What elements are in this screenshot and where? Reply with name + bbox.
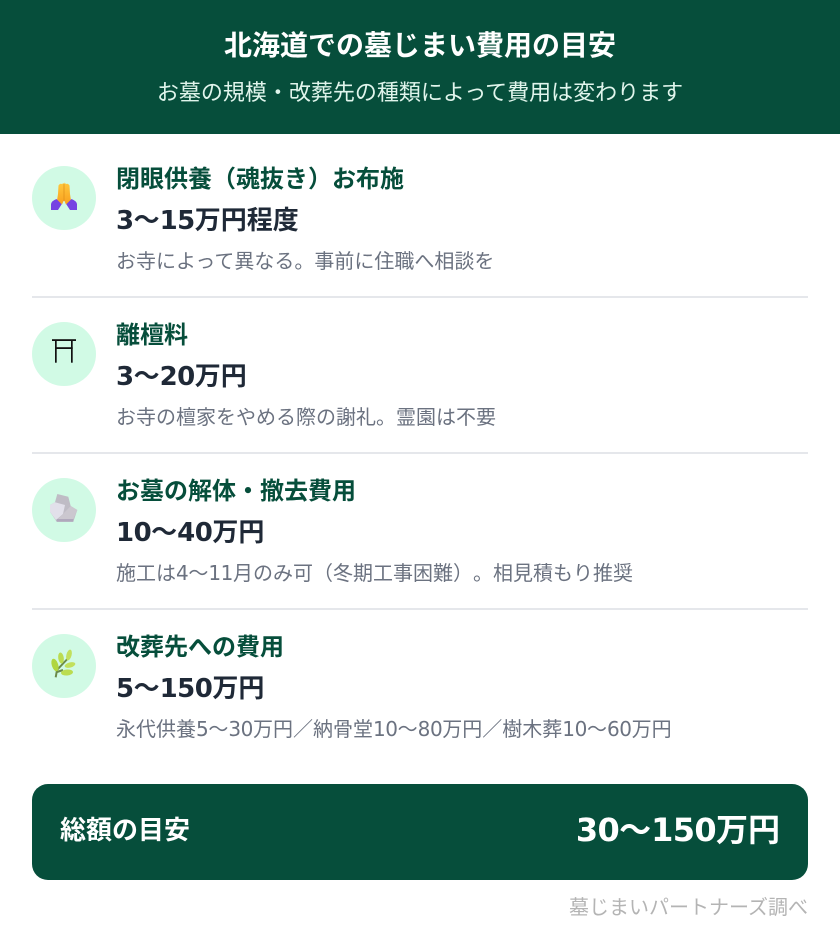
icon: praying hands xyxy=(32,166,96,230)
title: 北海道での墓じまい費用の目安 xyxy=(224,24,616,64)
item label: 閉眼供養（魂抜き）お布施 xyxy=(116,159,404,194)
total label: 総額の目安 xyxy=(60,810,190,847)
item note: お寺によって異なる。事前に住職へ相談を xyxy=(116,245,494,274)
total amount: 30〜150万円 xyxy=(576,805,780,851)
item note: 施工は4〜11月のみ可（冬期工事困難）。相見積もり推奨 xyxy=(116,557,633,586)
icon: herb xyxy=(32,634,96,698)
item amount: 3〜20万円 xyxy=(116,356,247,393)
total panel xyxy=(32,784,808,880)
item label: 離檀料 xyxy=(116,315,188,350)
icon: torii gate xyxy=(32,322,96,386)
cost item: temple leaving fee xyxy=(32,315,496,430)
cost item: closing ceremony offering xyxy=(32,159,494,274)
item label: 改葬先への費用 xyxy=(116,627,284,662)
item amount: 5〜150万円 xyxy=(116,668,264,705)
cost item: grave demolition xyxy=(32,471,633,586)
item amount: 10〜40万円 xyxy=(116,512,264,549)
cost item: reburial destination xyxy=(32,627,672,742)
subtitle: お墓の規模・改葬先の種類によって費用は変わります xyxy=(157,75,683,107)
item note: 永代供養5〜30万円／納骨堂10〜80万円／樹木葬10〜60万円 xyxy=(116,713,672,742)
item label: お墓の解体・撤去費用 xyxy=(116,471,356,506)
item note: お寺の檀家をやめる際の謝礼。霊園は不要 xyxy=(116,401,496,430)
header band xyxy=(0,0,840,134)
item amount: 3〜15万円程度 xyxy=(116,200,299,237)
icon: rock xyxy=(32,478,96,542)
source note: 墓じまいパートナーズ調べ xyxy=(569,891,808,920)
